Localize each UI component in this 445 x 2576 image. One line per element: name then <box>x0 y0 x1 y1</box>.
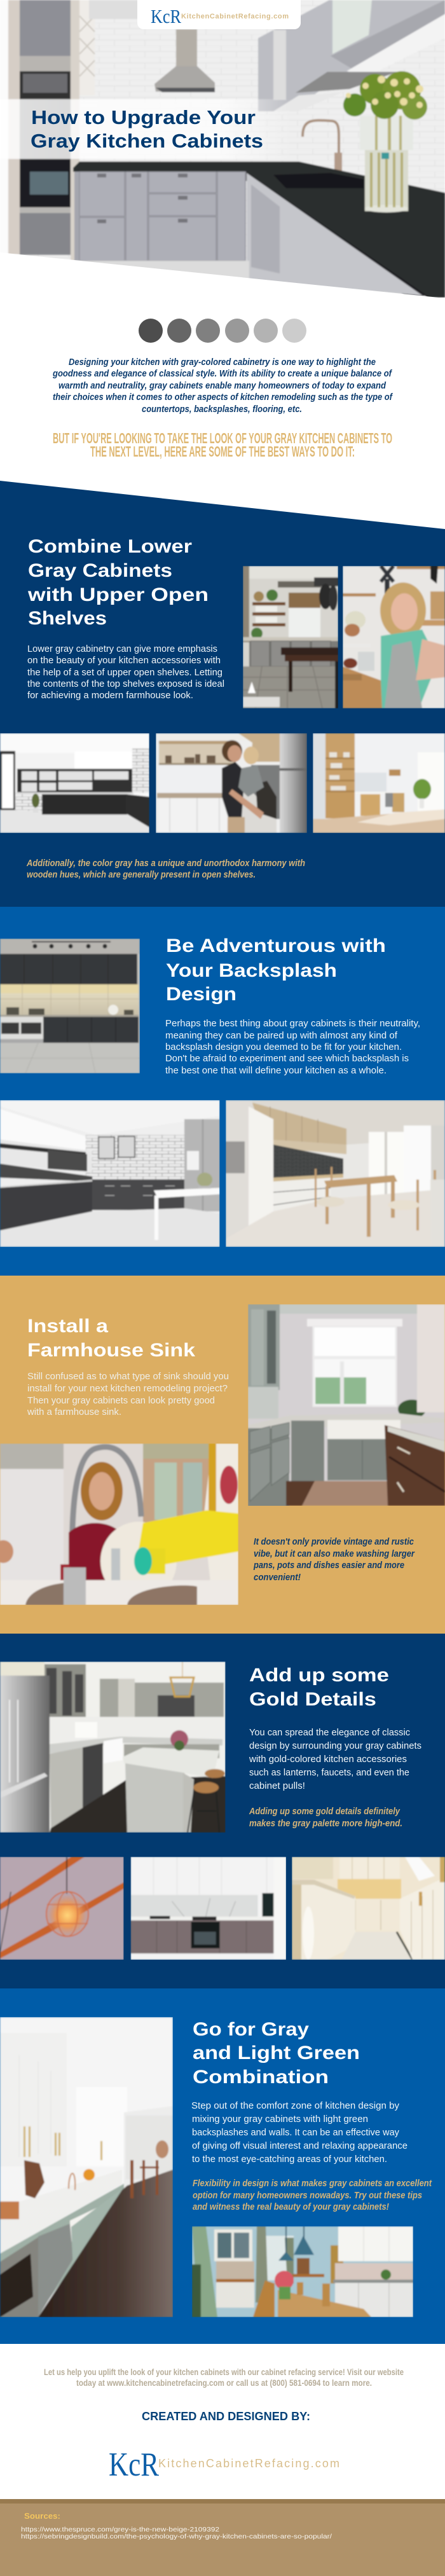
heading: Install a <box>27 1316 108 1337</box>
sources label: Sources: <box>24 2511 60 2521</box>
body text: mixing your gray cabinets with light green <box>192 2114 368 2125</box>
gold italic note <box>249 1806 402 1829</box>
intro text: Designing your kitchen with gray-colored cabinetry is one way to highlight the <box>69 357 376 368</box>
heading <box>27 536 209 629</box>
photo: dark kitchen with shelves <box>0 733 149 833</box>
photo: dining kitchen with blue walls <box>192 2226 413 2317</box>
heading: Farmhouse Sink <box>27 1340 195 1361</box>
navy italic note: vibe, but it can also make washing larger <box>254 1548 415 1559</box>
body text: design by surrounding your gray cabinets <box>249 1741 421 1751</box>
body text: the help of a set of upper open shelves. Letting <box>27 668 222 678</box>
footer logo <box>109 2446 339 2483</box>
photo: white brick and dark lower cabinets <box>0 1100 220 1247</box>
photo: farmhouse sink under window <box>248 1304 445 1506</box>
photo: woman in kitchen <box>343 566 445 708</box>
body text: on the beauty of your kitchen accessories with <box>27 656 221 666</box>
heading: Go for Gray <box>193 2019 309 2040</box>
body text: such as lanterns, faucets, and even the <box>249 1768 409 1778</box>
created by heading: CREATED AND DESIGNED BY: <box>142 2410 310 2423</box>
body text <box>191 2101 407 2165</box>
source links: https://sebringdesignbuild.com/the-psychology-of-why-gray-kitchen-cabinets-are-so-popular/ <box>21 2533 332 2540</box>
body text: Perhaps the best thing about gray cabinets is their neutrality, <box>165 1019 420 1029</box>
panel: be adventurous with backsplash <box>0 907 445 1276</box>
body text: of giving off visual interest and relaxing appearance <box>192 2141 407 2151</box>
title: Gray Kitchen Cabinets <box>31 130 263 152</box>
panel: combine lower cabinets with open shelves <box>0 481 445 907</box>
gold italic note <box>26 858 305 880</box>
photo: copper cage pendant <box>0 1857 123 1960</box>
intro text <box>52 357 394 415</box>
call to action text <box>44 2367 404 2388</box>
body text: the contents of the top shelves exposed is ideal <box>27 679 224 689</box>
gold italic note: and witness the real beauty of your gray cabinets! <box>193 2201 389 2212</box>
photo: dining area and dark backsplash <box>226 1100 445 1247</box>
body text: to the most eye-catching areas of your kitchen. <box>192 2154 387 2165</box>
gold lead-in heading <box>53 430 392 460</box>
call to action text: today at www.kitchencabinetrefacing.com or call us at (800) 581-0694 to learn more. <box>76 2378 372 2388</box>
body text: cabinet pulls! <box>249 1781 305 1791</box>
gold italic note: wooden hues, which are generally present in open shelves. <box>27 869 256 880</box>
navy italic note: convenient! <box>254 1572 301 1583</box>
footer logo: KitchenCabinetRefacing.com <box>158 2457 339 2470</box>
photo: wood shelf kitchen <box>313 733 445 833</box>
heading: Be Adventurous with <box>166 935 386 956</box>
source links: https://www.thespruce.com/grey-is-the-new-beige-2109392 <box>21 2526 219 2533</box>
footer logo: KcR <box>109 2446 160 2483</box>
body text: Step out of the comfort zone of kitchen design by <box>191 2101 400 2111</box>
logo card <box>137 0 301 29</box>
photo: dark cabinets and warm backsplash <box>0 939 140 1073</box>
body text: Still confused as to what type of sink should you <box>27 1372 229 1382</box>
gray swatch dots <box>139 319 306 343</box>
hero kitchen photo <box>8 0 445 298</box>
heading: Your Backsplash <box>166 960 337 981</box>
gold italic note <box>193 2178 432 2212</box>
body text <box>27 644 224 701</box>
logo card: KitchenCabinetRefacing.com <box>181 13 289 20</box>
body text: with gold-colored kitchen accessories <box>249 1754 407 1765</box>
heading: Shelves <box>28 608 107 629</box>
navy italic note: It doesn't only provide vintage and rustic <box>254 1536 414 1547</box>
navy italic note <box>253 1536 415 1583</box>
title <box>31 106 263 152</box>
gold italic note: Additionally, the color gray has a unique and unorthodox harmony with <box>26 858 305 869</box>
body text: Then your gray cabinets can look pretty good <box>27 1396 215 1406</box>
body text <box>249 1728 421 1791</box>
heading <box>249 1665 389 1710</box>
heading: and Light Green <box>193 2042 360 2063</box>
body text <box>27 1372 229 1417</box>
logo card: KcR <box>151 5 181 27</box>
body text: Don't be afraid to experiment and see which backsplash is <box>165 1054 409 1064</box>
panel: install a farmhouse sink <box>0 1276 445 1634</box>
body text: backsplashes and walls. It can be an effective way <box>192 2128 400 2138</box>
body text: backsplash design you deemed to be fit for your kitchen. <box>165 1042 402 1052</box>
body text: meaning they can be paired up with almost any kind of <box>165 1031 398 1041</box>
intro text: countertops, backsplashes, flooring, etc. <box>142 404 302 415</box>
body text: Lower gray cabinetry can give more emphasis <box>27 644 217 654</box>
heading <box>166 935 386 1005</box>
heading: Gold Details <box>249 1689 376 1710</box>
photo: father and child in kitchen <box>156 733 307 833</box>
panel: sources footer <box>0 2499 445 2576</box>
heading: Gray Cabinets <box>28 560 172 581</box>
panel: go for gray and light green <box>0 1988 445 2344</box>
intro text: goodness and elegance of classical style. With its ability to create a unique balance of <box>52 368 393 379</box>
photo: gray kitchen with gold lantern <box>0 1662 225 1833</box>
photo: farmhouse open shelves <box>243 566 338 708</box>
heading: Combination <box>193 2067 329 2088</box>
gold italic note: makes the gray palette more high-end. <box>249 1818 402 1829</box>
navy italic note: pans, pots and dishes easier and more <box>253 1560 404 1571</box>
photo: washing dishes at sink <box>0 1443 238 1605</box>
title: How to Upgrade Your <box>31 106 256 128</box>
intro text: their choices when it comes to other aspects of kitchen remodeling such as the type of <box>53 392 394 403</box>
photo: white and mauve kitchen <box>131 1857 286 1960</box>
body text: the best one that will define your kitchen as a whole. <box>165 1066 387 1076</box>
body text <box>165 1019 420 1076</box>
heading: Combine Lower <box>28 536 192 557</box>
intro text: warmth and neutrality, gray cabinets enable many homeowners of today to expand <box>58 380 387 391</box>
body text: with a farmhouse sink. <box>27 1407 121 1417</box>
source links <box>21 2526 332 2540</box>
body text: install for your next kitchen remodeling project? <box>27 1384 228 1394</box>
heading <box>27 1316 195 1361</box>
heading <box>193 2019 360 2088</box>
photo: cream kitchen with gold pulls <box>292 1857 445 1960</box>
heading: with Upper Open <box>27 584 209 605</box>
gold italic note: Adding up some gold details definitely <box>249 1806 400 1817</box>
panel: add up some gold details <box>0 1634 445 1988</box>
body text: You can spread the elegance of classic <box>249 1728 410 1738</box>
heading: Add up some <box>249 1665 389 1686</box>
heading: Design <box>166 984 236 1005</box>
photo: light green lower cabinets <box>0 2017 173 2317</box>
body text: for achieving a modern farmhouse look. <box>27 691 193 701</box>
